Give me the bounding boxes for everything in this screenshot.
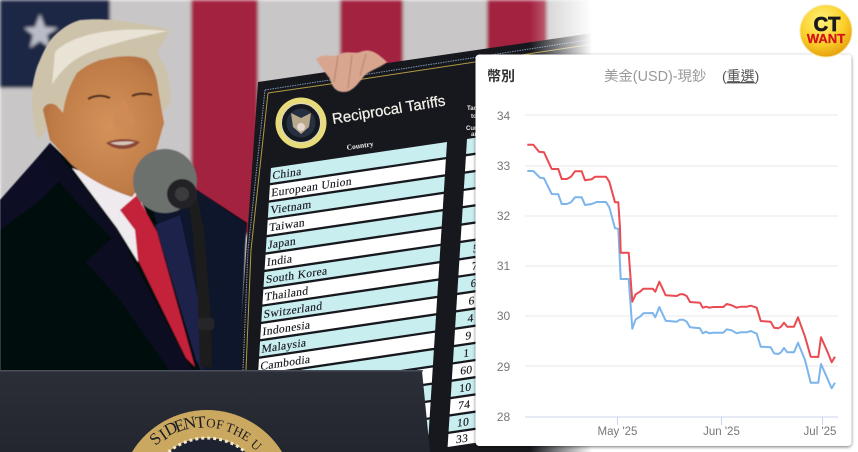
x axis labels: Jul '25 <box>804 426 836 438</box>
tariff value column: 9 <box>465 329 472 343</box>
board seal <box>276 98 326 148</box>
tie <box>120 195 195 367</box>
country column: Thailand <box>264 284 309 304</box>
y axis labels: 33 <box>497 159 510 173</box>
tariff value column: 74 <box>458 398 471 413</box>
tariff board <box>232 32 600 452</box>
photo background: flag <box>0 0 600 452</box>
hair <box>32 19 170 140</box>
country column: South Korea <box>266 264 328 286</box>
tariff value column: 1 <box>463 346 470 360</box>
y axis labels: 30 <box>497 309 510 323</box>
logo: CTWANT: CT <box>814 14 840 36</box>
clipped tariff column heading: Tariffs <box>467 106 486 112</box>
presidential seal on podium: SIDENT <box>145 412 207 449</box>
series: buying rate <box>527 171 835 388</box>
y axis labels: 34 <box>497 109 510 123</box>
country column: Switzerland <box>263 299 323 321</box>
y axis labels: 31 <box>497 259 510 273</box>
tariff value column: 60 <box>460 363 473 378</box>
tariff value column <box>448 132 517 447</box>
y axis labels: 28 <box>497 410 510 424</box>
suit <box>0 143 247 371</box>
clipped tariff column heading: Currency <box>466 126 493 132</box>
country column: Vietnam <box>270 198 312 217</box>
y axis labels: 29 <box>497 360 510 374</box>
white fade to the right of the photo <box>530 0 858 452</box>
x axis labels: May '25 <box>598 426 637 438</box>
microphone <box>133 149 214 367</box>
logo: CTWANT <box>800 5 852 57</box>
tariff value column: 6 <box>470 277 477 290</box>
mouth <box>106 139 140 149</box>
tariff value column: 10 <box>457 415 470 430</box>
x axis labels <box>598 426 836 438</box>
clipped tariff column heading: to <box>471 114 477 120</box>
tariff table rows <box>257 132 517 447</box>
country column <box>257 142 447 391</box>
line chart: USD exchange rate <box>497 109 838 438</box>
tariff value column: 6 <box>468 294 475 308</box>
selected currency: 美金(USD)-現鈔 <box>604 68 706 85</box>
board column heading: Country <box>346 139 374 152</box>
person: Trump <box>0 19 387 371</box>
board title: Reciprocal Tariffs <box>331 92 447 128</box>
country column: Indonesia <box>262 318 311 338</box>
nose <box>114 98 135 128</box>
country column: Cambodia <box>260 353 311 373</box>
logo: CTWANT: WANT <box>807 31 845 46</box>
tariff value column: 10 <box>459 380 472 395</box>
country column: China <box>272 165 302 182</box>
chart panel <box>476 54 852 446</box>
tariff value column: 7 <box>471 259 478 273</box>
face <box>43 56 164 197</box>
country column: Malaysia <box>261 336 307 356</box>
country column: India <box>267 252 293 269</box>
presidential seal on podium <box>132 410 282 452</box>
clipped tariff column heading <box>466 106 493 138</box>
shirt <box>72 168 146 262</box>
clipped tariff column heading: and <box>471 132 482 138</box>
y axis labels <box>497 109 510 424</box>
tariff value column: 33 <box>456 432 469 446</box>
eyes <box>88 94 152 99</box>
tariff value column: 5 <box>473 242 479 256</box>
podium <box>0 370 430 452</box>
y axis labels: 32 <box>497 209 510 223</box>
country column: European Union <box>271 175 352 200</box>
x axis labels: Jun '25 <box>703 426 740 438</box>
country column: Taiwan <box>269 216 305 234</box>
series: selling rate <box>527 145 835 362</box>
panel heading: currency label: 幣別 <box>487 68 515 84</box>
hand on board <box>316 50 387 92</box>
country rows behind the podium <box>393 368 433 440</box>
country column: Japan <box>268 235 296 252</box>
reselect link: (重選) <box>722 68 759 84</box>
tariff value column: 4 <box>467 311 474 325</box>
